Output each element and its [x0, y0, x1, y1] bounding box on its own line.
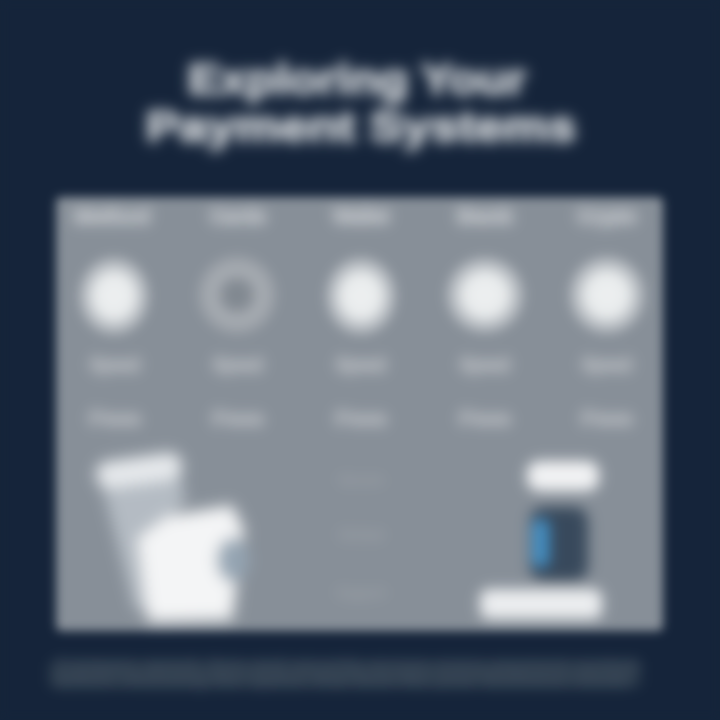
row two labels: Fees — [335, 409, 387, 430]
column headers: Method — [74, 206, 150, 228]
row one labels: Speed — [213, 355, 263, 376]
row two labels — [89, 409, 633, 430]
footer note — [50, 656, 640, 690]
illustration: stacked cards — [95, 451, 249, 622]
icon: circle 5 — [564, 251, 650, 339]
column headers: Cards — [210, 206, 266, 228]
title: Exploring Your — [188, 56, 526, 104]
icon: circle 1 — [74, 252, 154, 340]
centre column details: Global — [338, 527, 384, 544]
centre column details: Secure — [338, 472, 384, 489]
centre column details: Support — [336, 585, 387, 602]
panel: comparison table — [56, 197, 663, 631]
column headers: Crypto — [577, 206, 637, 228]
row one labels: Speed — [582, 355, 632, 376]
row two labels: Fees — [89, 409, 141, 430]
row two labels: Fees — [581, 409, 633, 430]
footer note: before choosing the option that best fits your business needs — [55, 673, 630, 690]
row one labels: Speed — [336, 355, 386, 376]
row two labels: Fees — [212, 409, 264, 430]
column headers: Bank — [457, 206, 514, 228]
column headers — [74, 206, 637, 228]
title: Payment Systems — [146, 103, 576, 151]
column headers: Wallet — [333, 206, 389, 228]
icon: circle 4 — [441, 252, 529, 338]
icon: ring 2 — [193, 251, 281, 339]
centre column details — [336, 472, 387, 602]
title — [146, 56, 576, 151]
row one labels: Speed — [90, 355, 140, 376]
footer note: Compare speed, fees and security across every payment system — [55, 656, 640, 673]
row two labels: Fees — [459, 409, 511, 430]
illustration: phone on stand — [480, 461, 602, 619]
row one labels — [90, 355, 632, 376]
row one labels: Speed — [460, 355, 510, 376]
icon: circle 3 — [321, 252, 401, 340]
